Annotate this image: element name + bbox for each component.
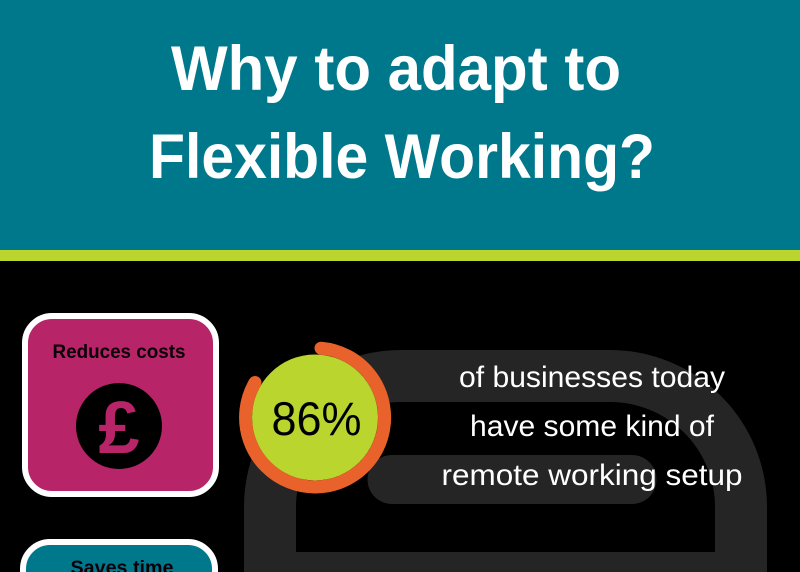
stat description: of businesses today: [459, 361, 725, 394]
title: [149, 34, 655, 192]
card: reduces costs: [25, 316, 216, 494]
green divider band: [0, 250, 800, 261]
header banner: [0, 0, 800, 250]
donut stat: 86%: [246, 348, 385, 487]
stat description: [442, 361, 742, 492]
progress ring: [246, 348, 385, 487]
title: Flexible Working?: [149, 122, 655, 192]
icon: pound sign: [76, 383, 162, 469]
stat description: remote working setup: [442, 459, 742, 492]
icon: pound sign: £: [98, 386, 140, 469]
card heading: reduces costs: Reduces costs: [52, 341, 186, 363]
stat description: have some kind of: [470, 410, 715, 443]
card: saves time: [23, 542, 215, 572]
stat value: 86%: [272, 392, 362, 445]
title: Why to adapt to: [171, 34, 621, 104]
background watermark shape: [244, 350, 767, 572]
